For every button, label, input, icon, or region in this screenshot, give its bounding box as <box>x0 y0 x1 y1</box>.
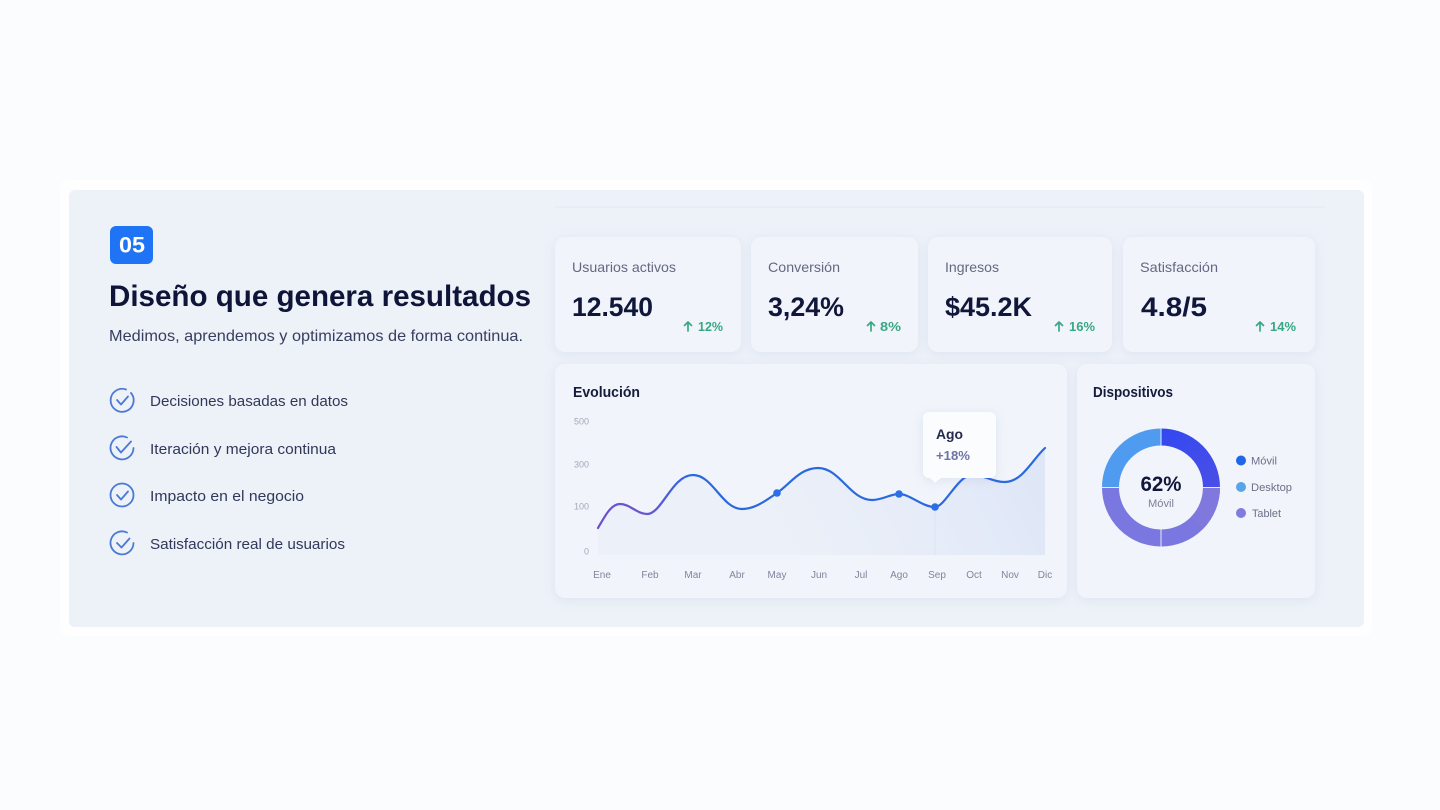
trend line <box>598 448 1045 528</box>
x axis month labels: Ene <box>593 570 611 581</box>
checklist <box>110 389 348 554</box>
legend: Desktop <box>1251 482 1292 494</box>
main panel background <box>69 190 1364 627</box>
y axis labels: 500 <box>574 416 589 426</box>
panel: Dispositivos donut chart <box>1077 364 1315 598</box>
chart heading: Evolución <box>573 384 640 401</box>
KPI card: Conversión: 3,24% <box>768 292 844 322</box>
left column: heading and list <box>109 226 531 554</box>
item: Satisfacción real de usuarios <box>111 531 345 554</box>
tooltip: Ago <box>936 426 963 442</box>
KPI card: Satisfacción: Satisfacción <box>1140 259 1218 275</box>
KPI card: Usuarios activos: 12.540 <box>572 292 653 322</box>
item: Satisfacción real de usuarios: Satisfacción real de usuarios <box>150 536 345 553</box>
x axis month labels: Jul <box>855 570 867 581</box>
x axis month labels: Sep <box>928 570 946 581</box>
x axis month labels: Mar <box>684 570 702 581</box>
KPI card: Usuarios activos <box>555 237 741 352</box>
outer glow frame <box>60 180 1372 636</box>
item: Impacto en el negocio <box>110 484 304 506</box>
item: Decisiones basadas en datos: Decisiones basadas en datos <box>150 393 348 410</box>
item: Iteración y mejora continua: Iteración y mejora continua <box>150 441 337 458</box>
tooltip: +18% <box>936 448 970 463</box>
legend: Móvil <box>1251 456 1277 468</box>
x axis month labels: Oct <box>966 570 982 581</box>
y axis labels: 0 <box>584 546 589 556</box>
KPI card: Satisfacción <box>1123 237 1315 352</box>
KPI card: Usuarios activos: Usuarios activos <box>572 259 676 275</box>
title: Diseño que genera resultados <box>109 280 531 313</box>
x axis month labels: Jun <box>811 570 827 581</box>
x axis month labels: Ago <box>890 570 908 581</box>
KPI card: Conversión: Conversión <box>768 259 840 275</box>
donut chart <box>1102 428 1220 547</box>
KPI card: Satisfacción: 4.8/5 <box>1141 292 1207 322</box>
y axis labels <box>574 416 589 556</box>
KPI card: Usuarios activos: 12% <box>698 319 723 334</box>
marker guide line <box>934 507 936 555</box>
item: Decisiones basadas en datos <box>111 389 348 412</box>
tooltip <box>923 412 996 483</box>
donut centre value: 62% <box>1140 473 1182 496</box>
legend: Tablet <box>1252 508 1281 520</box>
panel: Evolución line chart <box>555 364 1067 598</box>
y axis labels: 100 <box>574 502 589 512</box>
KPI card: Ingresos: 16% <box>1069 319 1095 334</box>
KPI card: Conversión <box>751 237 918 352</box>
x axis month labels: Abr <box>729 570 745 581</box>
donut centre value: Móvil <box>1148 498 1174 510</box>
donut heading: Dispositivos <box>1093 384 1173 401</box>
badge: section number 05: 05 <box>119 232 145 258</box>
KPI card: Ingresos: $45.2K <box>945 292 1032 322</box>
x axis month labels: Feb <box>641 570 659 581</box>
data points <box>773 489 939 511</box>
KPI card: Satisfacción: 14% <box>1270 319 1296 334</box>
KPI card: Ingresos: Ingresos <box>945 259 999 275</box>
badge: section number 05 <box>110 226 153 264</box>
x axis month labels: Dic <box>1038 570 1052 581</box>
y axis labels: 300 <box>574 460 589 470</box>
legend <box>1236 456 1292 520</box>
donut centre value <box>1140 473 1182 510</box>
item: Iteración y mejora continua <box>111 436 337 459</box>
x axis month labels: Nov <box>1001 570 1019 581</box>
KPI card: Ingresos <box>928 237 1112 352</box>
area under line <box>598 448 1045 555</box>
subtitle: Medimos, aprendemos y optimizamos de forma continua. <box>109 328 523 345</box>
KPI card: Conversión: 8% <box>880 319 901 334</box>
item: Impacto en el negocio: Impacto en el negocio <box>150 488 304 505</box>
x axis month labels <box>593 570 1052 581</box>
x axis month labels: May <box>768 570 786 581</box>
